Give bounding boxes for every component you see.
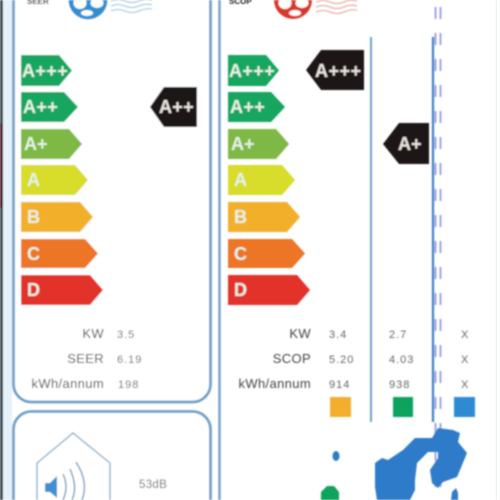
data table: cooling: 198 xyxy=(118,379,139,391)
climate swatch: green xyxy=(393,397,413,417)
data table: heating: X xyxy=(461,329,469,341)
icon: blue fan xyxy=(68,0,108,20)
class A+: A+ xyxy=(231,134,255,154)
class A: A xyxy=(27,170,40,190)
data table: heating: X xyxy=(461,379,469,391)
class A++ xyxy=(21,92,78,122)
class A++ xyxy=(228,92,285,122)
rating tag: A+++: A+++ xyxy=(315,61,362,81)
data table: heating: 938 xyxy=(389,379,410,391)
map: Iceland xyxy=(332,451,340,461)
data table: heating: SCOP xyxy=(273,351,311,366)
panel: cooling SEER xyxy=(14,0,210,402)
data table: heating xyxy=(238,326,469,391)
class D: D xyxy=(27,280,40,300)
class C: C xyxy=(27,244,40,264)
class A: A xyxy=(234,170,247,190)
class B: B xyxy=(234,207,247,227)
panel: noise xyxy=(14,412,210,500)
data table: cooling: KW xyxy=(82,326,104,341)
data table: heating: kWh/annum xyxy=(238,376,311,391)
noise value: 53dB xyxy=(139,479,167,491)
rating tag: A+ xyxy=(383,123,429,164)
left edge strip xyxy=(0,0,12,500)
map: Scandinavia xyxy=(375,428,467,500)
data table: heating: X xyxy=(461,354,469,366)
map: Baltic coast xyxy=(451,488,458,500)
icon: blue air waves xyxy=(111,0,152,13)
panel: heating SCOP xyxy=(220,0,497,500)
column divider xyxy=(370,37,372,422)
class A+: A+ xyxy=(24,134,48,154)
climate swatch: orange xyxy=(330,397,351,417)
data table: heating: 914 xyxy=(329,379,350,391)
data table: heating: 4.03 xyxy=(389,354,414,366)
class B xyxy=(228,202,300,232)
climate swatch: blue xyxy=(454,397,475,417)
data table: cooling xyxy=(31,326,142,391)
class A+++: A+++ xyxy=(229,61,275,81)
class D xyxy=(21,275,103,305)
rating tag: A++: A++ xyxy=(159,97,194,117)
class A+++ xyxy=(228,55,279,86)
icon: red air waves xyxy=(316,0,357,14)
class A+ xyxy=(228,129,289,159)
class A+ xyxy=(21,129,82,159)
class B xyxy=(21,202,93,232)
data table: cooling: 6.19 xyxy=(117,354,142,366)
dashed overlay lines xyxy=(436,7,440,500)
class C xyxy=(228,239,305,268)
class A xyxy=(21,165,88,195)
data table: cooling: SEER xyxy=(67,351,104,366)
class A+++: A+++ xyxy=(22,61,68,81)
column divider xyxy=(432,37,434,422)
class D: D xyxy=(234,280,247,300)
class A++: A++ xyxy=(230,97,265,117)
class C xyxy=(21,239,98,268)
class A xyxy=(228,165,295,195)
data table: heating: KW xyxy=(289,326,311,341)
map: Europe climate zones xyxy=(321,428,467,500)
rating tag: A++ xyxy=(150,87,197,127)
map: Ireland green zone xyxy=(321,486,339,500)
class B: B xyxy=(27,207,40,227)
rating tag: A+++ xyxy=(306,50,364,90)
class D xyxy=(228,275,310,305)
energy scale: heating xyxy=(228,55,310,305)
icon: red fan xyxy=(274,0,312,19)
class C: C xyxy=(234,244,247,264)
data table: cooling: kWh/annum xyxy=(31,376,104,391)
data table: heating: 5.20 xyxy=(329,354,354,366)
data table: heating: 2.7 xyxy=(389,329,407,341)
energy scale: cooling xyxy=(21,55,103,305)
data table: cooling: 3.5 xyxy=(117,329,135,341)
class A++: A++ xyxy=(23,97,58,117)
class A+++ xyxy=(21,55,72,86)
rating tag: A+: A+ xyxy=(398,134,422,154)
data table: heating: 3.4 xyxy=(329,329,347,341)
icon: house with speaker xyxy=(37,433,110,500)
